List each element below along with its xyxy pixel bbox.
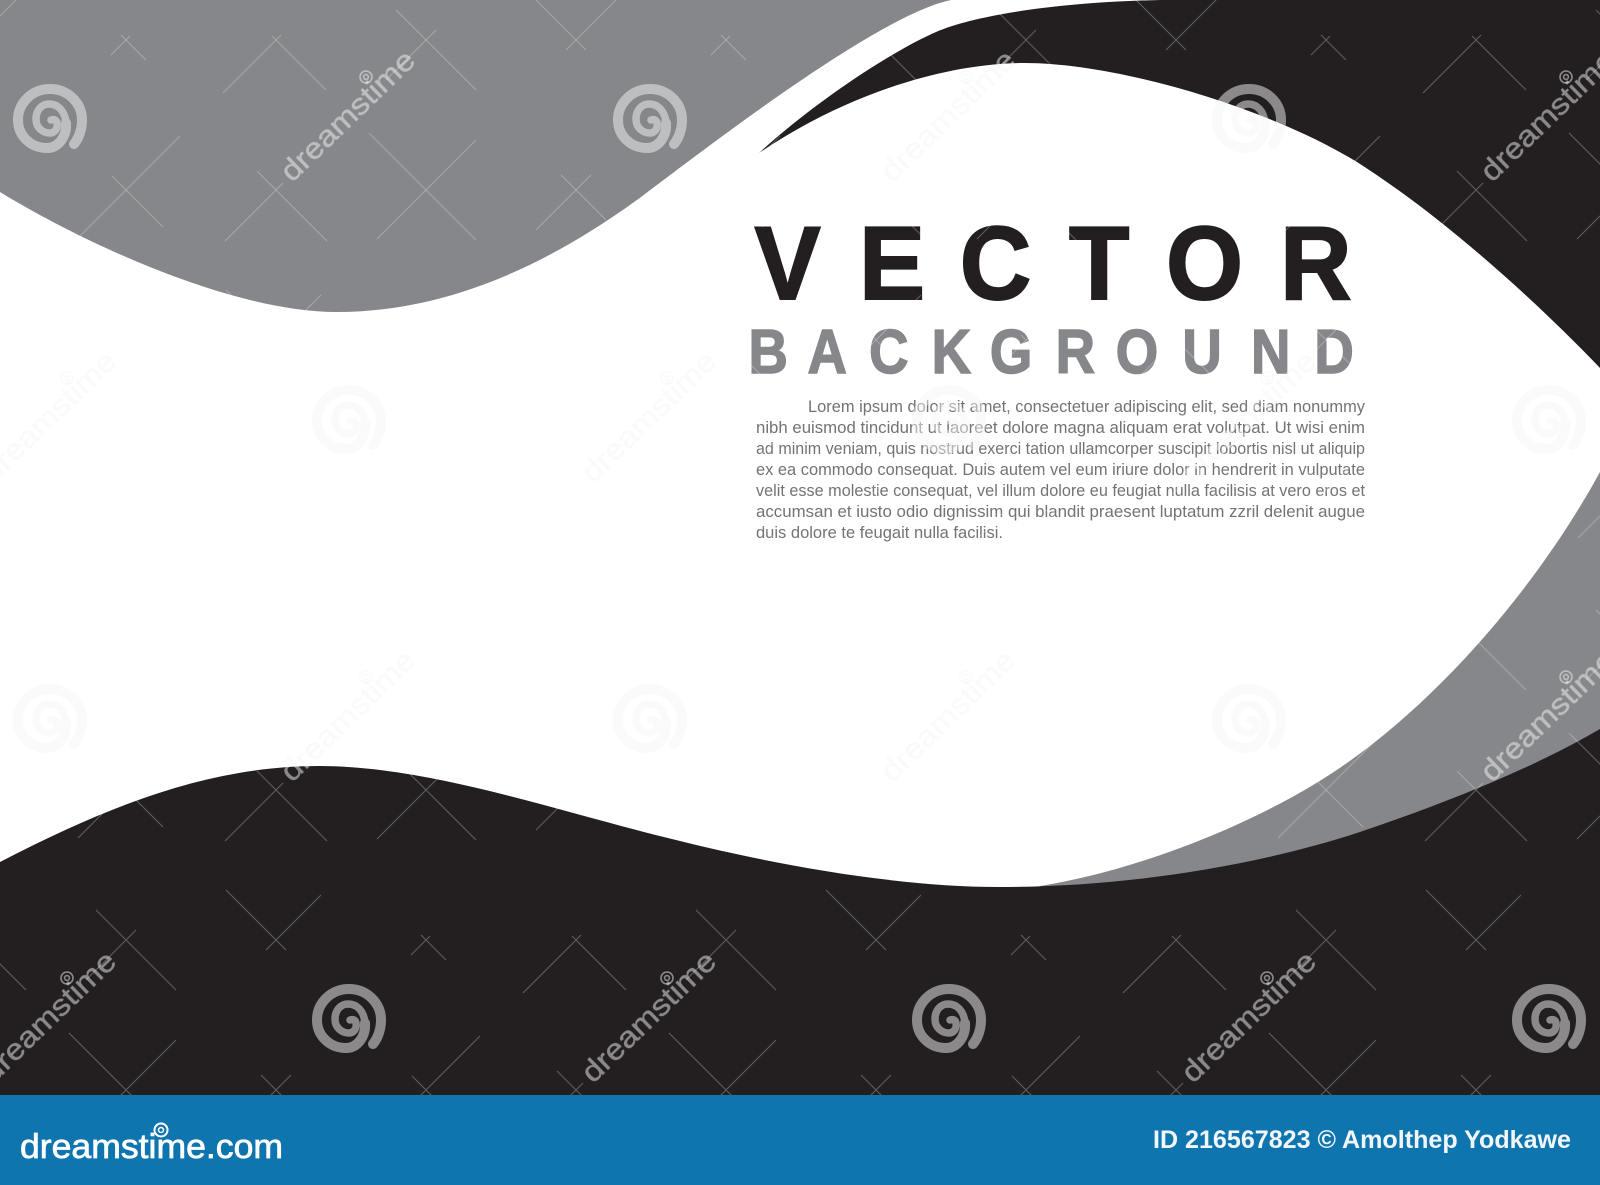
body text block: ex ea commodo consequat. Duis autem vel eum iriure dolor in hendrerit in vulputate: [756, 460, 1365, 479]
body text block: [756, 397, 1365, 542]
footer logo: dreamstime.com: dreamstime.com: [20, 1128, 283, 1166]
body text block: ad minim veniam, quis nostrud exerci tation ullamcorper suscipit lobortis nisl ut aliquip: [756, 439, 1365, 458]
body text block: nibh euismod tincidunt ut laoreet dolore magna aliquam erat volutpat. Ut wisi enim: [756, 418, 1365, 437]
body text block: accumsan et iusto odio dignissim qui blandit praesent luptatum zzril delenit augue: [756, 502, 1365, 521]
watermark text: dreamstime: [274, 644, 422, 788]
watermark text: dreamstime: [575, 945, 723, 1089]
black wave bottom: [0, 729, 1600, 1095]
watermark text: dreamstime: [1175, 345, 1323, 489]
body text block: velit esse molestie consequat, vel illum dolore eu feugiat nulla facilisis at vero eros et: [756, 481, 1365, 500]
black swoosh top right: [759, 0, 1600, 368]
body text block: Lorem ipsum dolor sit amet, consectetuer adipiscing elit, sed diam nonummy: [808, 397, 1365, 416]
heading: BACKGROUND: BACKGROUND: [749, 318, 1354, 387]
gray wave top left: [0, 0, 951, 312]
watermark text: dreamstime: [1175, 945, 1323, 1089]
watermark text: dreamstime: [274, 44, 422, 188]
watermark text: dreamstime: [874, 44, 1022, 188]
footer bar: [0, 1095, 1600, 1185]
heading: VECTOR: VECTOR: [755, 206, 1351, 322]
watermark small logo marks: [61, 71, 1572, 984]
gray swoosh bottom right: [1040, 472, 1600, 900]
watermark text: dreamstime: [575, 345, 723, 489]
body text block: duis dolore te feugait nulla facilisi.: [756, 523, 1003, 542]
footer credit: image id and author: ID 216567823 © Amolthep Yodkawe: [1153, 1126, 1571, 1154]
watermark spirals: [18, 89, 1581, 1048]
watermark text: dreamstime: [874, 644, 1022, 788]
